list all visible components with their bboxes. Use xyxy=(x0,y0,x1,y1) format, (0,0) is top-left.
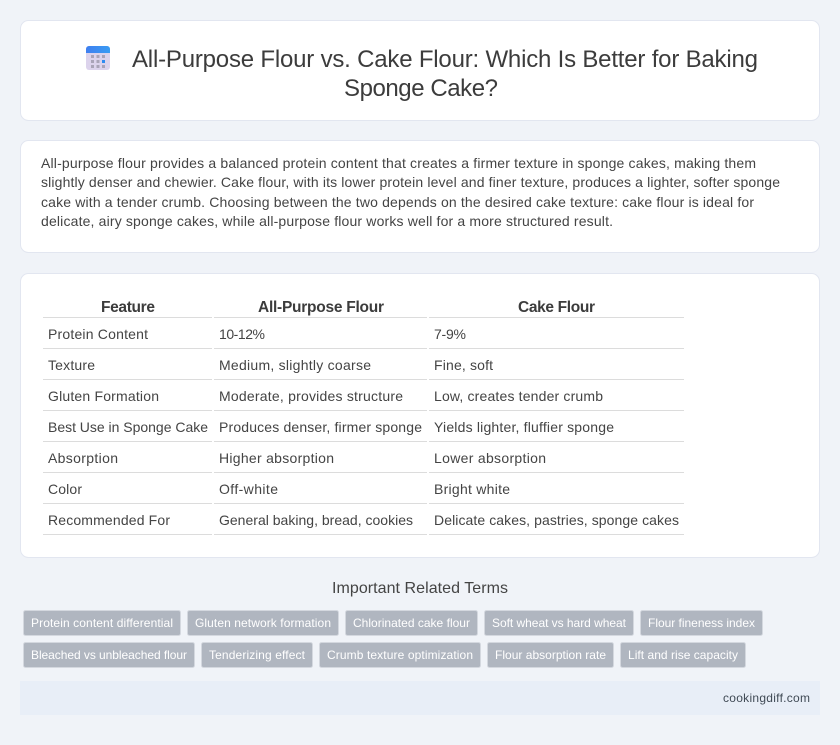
panel: introduction text: cake with a tender crumb. Choosing between the two depends on the desired cake texture: cake flour is ideal for xyxy=(41,194,754,210)
row: absorption: Lower absorption xyxy=(434,450,546,466)
row: color: Off-white xyxy=(219,481,278,497)
row: color xyxy=(48,481,510,497)
tag xyxy=(202,642,312,668)
row: texture xyxy=(48,357,493,373)
tag xyxy=(320,642,480,668)
panel: comparison table xyxy=(20,274,820,558)
tag: Bleached vs unbleached flour xyxy=(31,648,187,662)
row: best use in sponge cake xyxy=(48,419,614,435)
row: protein content: 7-9% xyxy=(434,326,466,342)
panel: introduction text: delicate, airy sponge cakes, while all-purpose flour works well for a more structured result. xyxy=(41,213,613,229)
title xyxy=(132,46,758,102)
heading: related terms: Important Related Terms xyxy=(332,580,508,597)
row: absorption: Higher absorption xyxy=(219,450,334,466)
tag: Gluten network formation xyxy=(195,616,331,630)
row: color: Bright white xyxy=(434,481,510,497)
table header: Cake Flour xyxy=(518,299,595,316)
row: protein content xyxy=(48,326,466,342)
icon: calendar xyxy=(86,46,110,70)
title: All-Purpose Flour vs. Cake Flour: Which Is Better for Baking xyxy=(132,46,758,73)
row: best use in sponge cake: Best Use in Sponge Cake xyxy=(48,419,208,435)
row: gluten formation: Moderate, provides structure xyxy=(219,388,403,404)
tag: Flour fineness index xyxy=(648,616,755,630)
tag xyxy=(24,642,194,668)
row: texture: Fine, soft xyxy=(434,357,493,373)
row: gluten formation: Low, creates tender crumb xyxy=(434,388,603,404)
tag xyxy=(640,610,762,636)
row: gluten formation xyxy=(48,388,603,404)
row: color: Color xyxy=(48,481,82,497)
tag xyxy=(346,610,478,636)
tag xyxy=(24,610,180,636)
tag: Chlorinated cake flour xyxy=(353,616,470,630)
table header: Feature xyxy=(101,299,155,316)
row: best use in sponge cake: Produces denser, firmer sponge xyxy=(219,419,422,435)
row: best use in sponge cake: Yields lighter, fluffier sponge xyxy=(434,419,614,435)
panel: introduction text: slightly denser and chewier. Cake flour, with its lower protein level and finer texture, produces a lighter, softer sponge xyxy=(41,174,780,190)
tag xyxy=(620,642,746,668)
tag: Soft wheat vs hard wheat xyxy=(492,616,627,630)
table header: All-Purpose Flour xyxy=(258,299,384,316)
table header xyxy=(101,299,595,316)
footer xyxy=(20,681,820,715)
tag: Crumb texture optimization xyxy=(327,648,473,662)
row: absorption xyxy=(48,450,546,466)
panel: introduction text: All-purpose flour provides a balanced protein content that creates a firmer texture in sponge cakes, making them xyxy=(41,155,756,171)
row: protein content: 10-12% xyxy=(219,326,265,342)
row: texture: Texture xyxy=(48,357,95,373)
tag: Flour absorption rate xyxy=(495,648,606,662)
related term tags xyxy=(24,610,762,668)
row: recommended for: Recommended For xyxy=(48,512,170,528)
tag: Lift and rise capacity xyxy=(628,648,738,662)
footer: cookingdiff.com xyxy=(723,691,810,705)
tag xyxy=(488,642,614,668)
title: Sponge Cake? xyxy=(344,75,498,102)
row: gluten formation: Gluten Formation xyxy=(48,388,159,404)
row: recommended for xyxy=(48,512,679,528)
row: recommended for: Delicate cakes, pastries, sponge cakes xyxy=(434,512,679,528)
row: texture: Medium, slightly coarse xyxy=(219,357,371,373)
panel: introduction text xyxy=(20,140,820,252)
row: protein content: Protein Content xyxy=(48,326,148,342)
tag: Tenderizing effect xyxy=(209,648,306,662)
tag xyxy=(484,610,634,636)
tag: Protein content differential xyxy=(31,616,173,630)
row: recommended for: General baking, bread, cookies xyxy=(219,512,413,528)
tag xyxy=(188,610,338,636)
row: absorption: Absorption xyxy=(48,450,118,466)
panel: title card xyxy=(20,20,820,120)
